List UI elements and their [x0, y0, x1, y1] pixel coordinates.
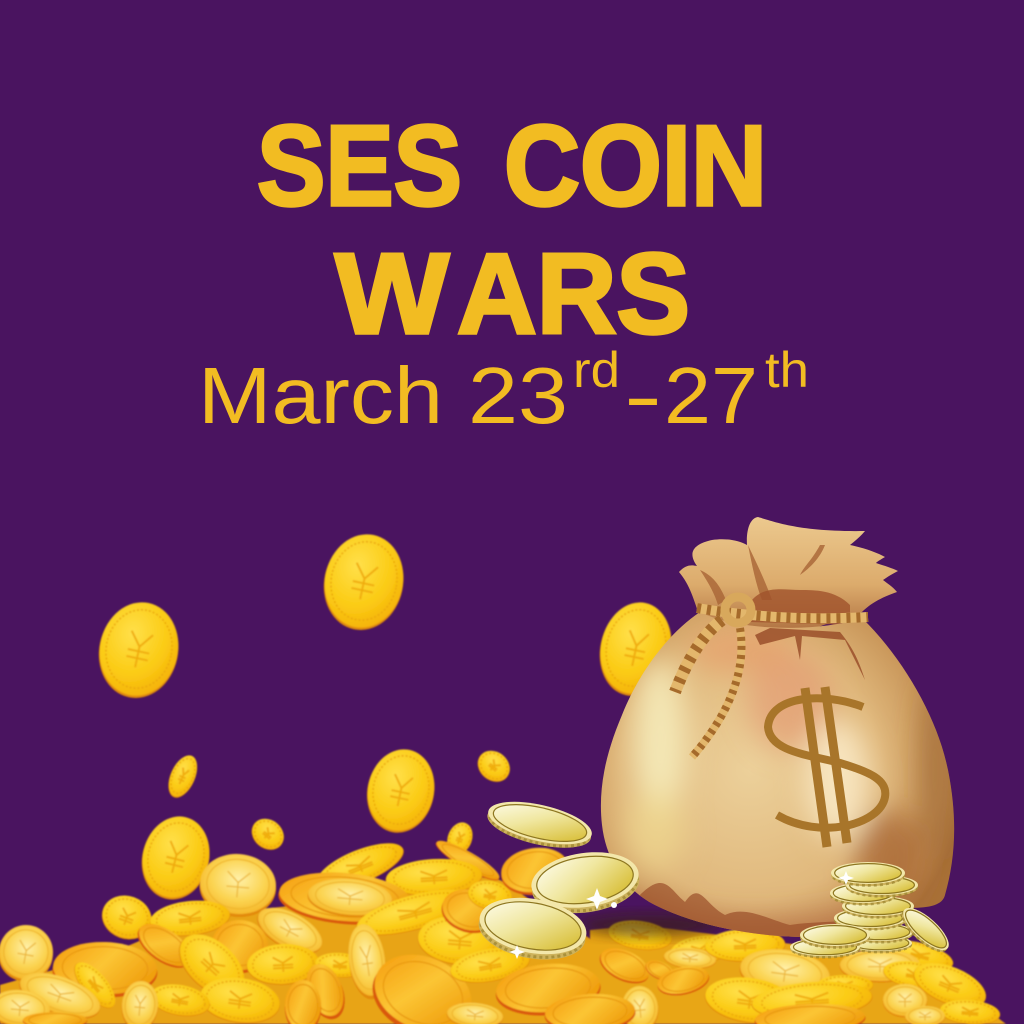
pile right of bag — [494, 917, 1006, 1024]
coin stack — [790, 862, 955, 958]
coin pile — [0, 819, 600, 1024]
title: SES COIN WARS: ARS — [457, 231, 690, 358]
title: SES COIN WARS — [257, 103, 767, 358]
title: SES COIN WARS: SES — [257, 103, 462, 230]
date: March 23rd-27th: rd — [573, 342, 620, 398]
date: March 23rd-27th: 23 — [468, 351, 568, 440]
date: March 23rd-27th — [198, 342, 809, 440]
large tilted coins — [474, 794, 643, 967]
bag shadow — [580, 913, 720, 937]
bag body — [601, 612, 954, 937]
date: March 23rd-27th: - — [624, 351, 662, 440]
date: March 23rd-27th: 27 — [664, 351, 758, 440]
date: March 23rd-27th: March — [198, 351, 443, 440]
rope — [675, 597, 868, 757]
date: March 23rd-27th: th — [765, 342, 809, 398]
title: SES COIN WARS: COIN — [504, 103, 767, 230]
bag neck shading — [755, 628, 865, 680]
bag ruffled top — [679, 517, 898, 640]
falling coins — [90, 527, 680, 907]
dollar sign — [768, 687, 885, 847]
sparkles — [509, 871, 854, 959]
bag highlights — [610, 628, 949, 950]
money bag — [580, 517, 954, 950]
title: SES COIN WARS: W — [335, 231, 449, 358]
